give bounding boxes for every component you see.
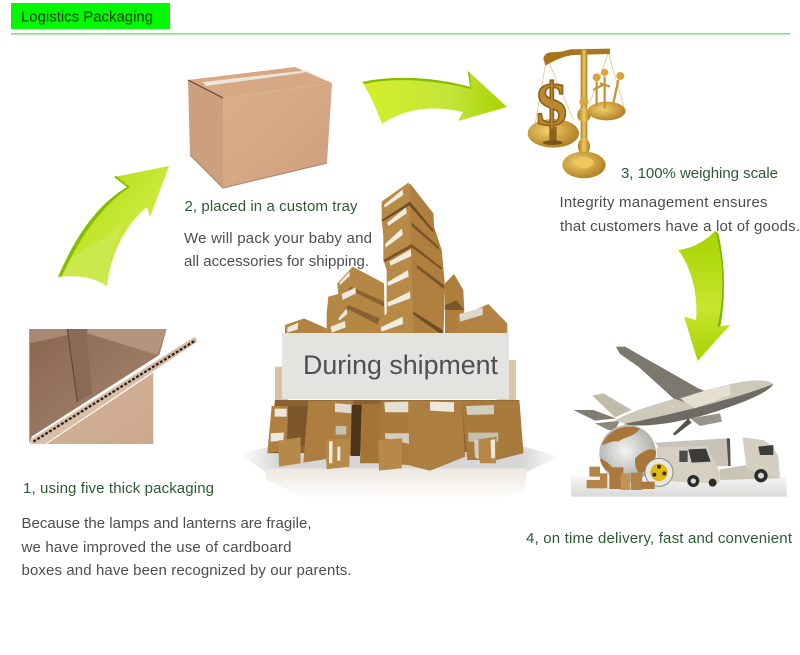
label: During shipment: During shipment — [303, 350, 498, 380]
parcels — [587, 467, 655, 490]
airplane — [573, 347, 773, 435]
step 1 text: we have improved the use of cardboard — [20, 539, 292, 556]
wheel — [645, 458, 673, 486]
step 1 text: boxes and have been recognized by our parents. — [22, 562, 352, 579]
arrow: step 2 to step 3 — [362, 71, 507, 124]
step 1 text — [20, 515, 352, 579]
step 3 text: that customers have a lot of goods. — [560, 218, 800, 235]
icon: dollar sign: $ — [536, 71, 567, 139]
arrow: step 3 to step 4 — [678, 231, 730, 361]
step 3 heading: 3, 100% weighing scale — [621, 165, 778, 182]
step 1 text: Because the lamps and lanterns are fragile, — [22, 515, 312, 532]
image: cardboard box — [188, 67, 332, 188]
truck — [655, 437, 780, 482]
step 2 heading: 2, placed in a custom tray — [184, 198, 358, 215]
step 4 heading: 4, on time delivery, fast and convenient — [526, 530, 793, 547]
image: five-layer corrugated cardboard — [29, 329, 197, 444]
arrow: step 1 to step 2 — [58, 166, 169, 286]
image: golden weighing scale — [528, 49, 626, 178]
upper boxes — [285, 183, 507, 335]
step 2 text: We will pack your baby and — [184, 230, 372, 247]
van — [657, 446, 720, 487]
globe — [599, 425, 656, 482]
heading: Logistics Packaging — [11, 3, 170, 29]
image: airplane, globe, trucks and parcels — [571, 347, 787, 497]
heading: Logistics Packaging: Logistics Packaging — [21, 8, 153, 26]
step 2 text: all accessories for shipping. — [184, 253, 369, 270]
step 3 text — [560, 194, 800, 235]
image: stack of shipping boxes — [240, 183, 560, 500]
step 2 text — [184, 230, 372, 270]
label: During shipment — [282, 333, 509, 399]
step 3 text: Integrity management ensures — [560, 194, 768, 211]
floor shadow and reflection — [240, 447, 560, 500]
lower boxes — [267, 360, 523, 471]
step 1 heading: 1, using five thick packaging — [23, 480, 214, 497]
